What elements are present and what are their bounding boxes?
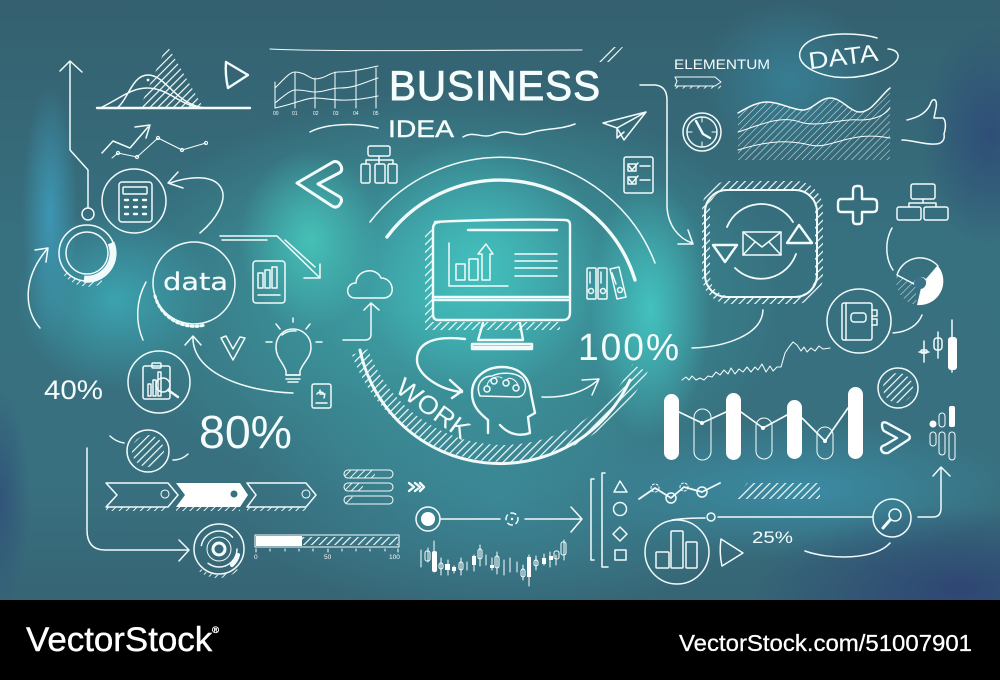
icon: ring gauge [59, 225, 115, 284]
arrow: curved into calculator [168, 172, 223, 233]
arc next to pie [887, 228, 893, 270]
icon: small pill bars [930, 406, 955, 460]
heading: IDEA: IDEA [388, 116, 454, 143]
data circle [153, 242, 235, 326]
icon: candlesticks right [919, 320, 957, 372]
chart: top wave line chart: 02 [313, 111, 319, 117]
arc under magnifier [805, 543, 890, 557]
chart: top wave line chart: 05 [373, 111, 379, 117]
wavy underline [463, 124, 575, 137]
label: 80%: 80% [199, 406, 292, 458]
icon: bar chart tablet [253, 261, 285, 303]
label: 40%: 40% [44, 375, 103, 405]
progress bar with scale: 50 [324, 554, 332, 561]
icon: arrow from circle going up [60, 61, 94, 220]
footer brand: VectorStock [26, 621, 207, 659]
chart: hatched area waves [737, 86, 891, 160]
arrow: curved to brain head [417, 338, 465, 398]
icon: network boxes [897, 184, 948, 220]
icon: clipboard magnifier in circle [128, 351, 190, 413]
icon: hatched target with arcs [110, 430, 188, 472]
chart: top wave line chart: 03 [333, 111, 339, 117]
icon: bracket with shapes [591, 473, 627, 567]
arrow: curved up to data circle [185, 336, 293, 393]
chart: candlesticks bottom [421, 540, 566, 586]
icon: progress pills [344, 470, 393, 504]
icon: zigzag growth arrow and dotted line [102, 125, 208, 159]
icon: org chart [361, 146, 397, 183]
arrow: L shape to target [87, 448, 189, 561]
chart: top wave line chart [273, 66, 379, 117]
icon: hatched circle [878, 368, 918, 408]
progress bar with scale [254, 535, 400, 561]
icon: thumbs up [902, 100, 945, 144]
footer band [0, 600, 1000, 680]
icon: notebook in circle [827, 289, 891, 353]
icon: calculator in circle [102, 169, 166, 233]
scale labels: 0 [254, 554, 258, 561]
icon: bell curve chart with hatching [97, 45, 250, 108]
progress bar with scale: 100 [389, 554, 400, 561]
hatch block top [597, 47, 623, 62]
chart: small line with markers [639, 483, 720, 503]
label: DATA: DATA [807, 40, 880, 75]
icon: play triangle top [226, 62, 248, 88]
icon: paper plane [603, 112, 646, 140]
arrow: angled down right [220, 236, 320, 278]
long line with small circle [672, 513, 873, 521]
heading: BUSINESS: BUSINESS [389, 62, 601, 109]
icon: signpost arrow [675, 77, 721, 87]
icon: cloud with up arrow [343, 271, 392, 340]
footer brand: ® [212, 625, 219, 635]
icon: magnifier in circle [873, 499, 911, 537]
icon: play triangle bottom [720, 539, 743, 566]
icon: small report card [312, 384, 331, 408]
icon: pie chart [896, 258, 943, 305]
chart: top wave line chart: 01 [292, 111, 298, 117]
icon: binders [587, 267, 626, 299]
label: data: data [163, 268, 228, 296]
chart: noise line [682, 342, 830, 380]
arc beside data circle [138, 282, 146, 340]
label: 25%: 25% [752, 528, 793, 547]
chart: pill bars with line [664, 387, 863, 460]
chart: top wave line chart: 04 [353, 111, 359, 117]
arrow: curved left [28, 248, 48, 328]
DATA ellipse [800, 34, 898, 77]
hatch block [735, 483, 820, 499]
icon: clock [683, 113, 721, 151]
small arc under chart [310, 125, 378, 132]
icon: left chevron [297, 162, 342, 207]
icon: monitor with chart [425, 220, 570, 349]
icon: double chevron [409, 483, 424, 491]
arrow: from head to 100% [542, 379, 599, 397]
icon: arrow panels [106, 483, 316, 509]
arc near notebook [893, 315, 922, 333]
icon: head with brain [472, 367, 535, 435]
label: ELEMENTUM: ELEMENTUM [674, 57, 770, 72]
icon: light bulb [266, 318, 322, 382]
icon: right chevron [881, 422, 910, 453]
icon: timeline with arrow [416, 507, 582, 532]
top rule line [270, 49, 582, 51]
icon: plus [838, 186, 877, 224]
mail icon box [705, 185, 819, 300]
icon: concentric target [194, 524, 244, 577]
curve from mail box to 100% [692, 310, 763, 348]
icon: bar chart in circle [645, 520, 709, 584]
arrow: from top down to mail box [640, 85, 693, 244]
label: 100%: 100% [578, 327, 681, 369]
arrow: from magnifier up [918, 467, 950, 517]
label: WORK: WORK [390, 372, 477, 446]
footer url: VectorStock.com/51007901 [679, 630, 972, 656]
icon: checklist [624, 157, 653, 193]
central ring arcs [360, 157, 655, 464]
icon: V check [221, 336, 245, 360]
axis labels: 00 [273, 111, 279, 117]
